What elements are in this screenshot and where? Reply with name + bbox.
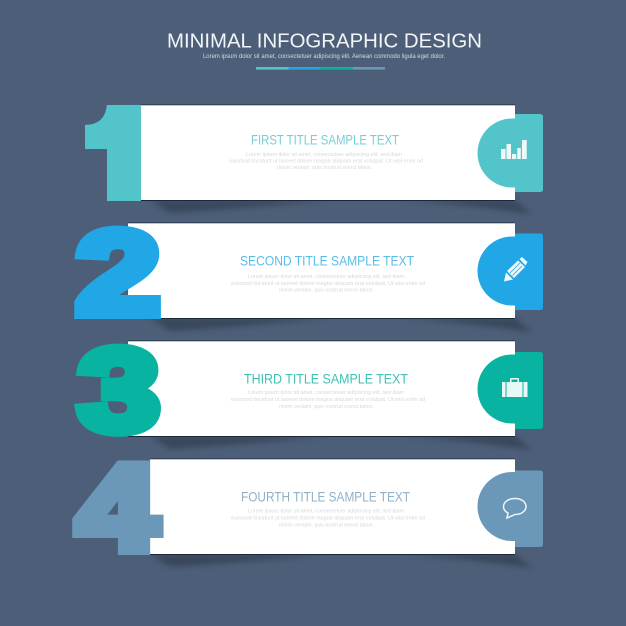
body text xyxy=(231,508,425,528)
tab with briefcase icon xyxy=(478,352,543,429)
body text xyxy=(231,274,425,294)
body text xyxy=(231,390,425,410)
title: MINIMAL INFOGRAPHIC DESIGN xyxy=(167,30,482,52)
body text: minim veniam, quis nostrud exerci tation. xyxy=(279,404,374,410)
body text: Lorem ipsum dolor sit amet, consectetuer adipiscing elit, sed diam xyxy=(248,274,404,280)
icon: pencil xyxy=(504,257,528,282)
title colour bar xyxy=(256,67,385,70)
icon: briefcase xyxy=(502,378,528,397)
body text: Lorem ipsum dolor sit amet, consectetuer adipiscing elit, sed diam xyxy=(248,508,404,514)
panel: fourth item xyxy=(77,440,543,576)
body text: minim veniam, quis nostrud exerci tation. xyxy=(279,288,374,294)
icon: bar chart xyxy=(501,140,527,159)
body text xyxy=(229,152,423,171)
body text: euismod tincidunt ut laoreet dolore magna aliquam erat volutpat. Ut wisi enim ad xyxy=(229,158,423,164)
numeral 1 xyxy=(85,105,141,201)
body text: minim veniam, quis nostrud exerci tation. xyxy=(279,522,374,528)
body text: Lorem ipsum dolor sit amet, consectetuer adipiscing elit, sed diam xyxy=(248,390,404,396)
icon: speech bubble xyxy=(504,498,526,518)
heading: SECOND TITLE SAMPLE TEXT xyxy=(240,252,414,268)
body text: minim veniam, quis nostrud exerci tation. xyxy=(277,165,372,171)
heading: FOURTH TITLE SAMPLE TEXT xyxy=(241,488,410,504)
tab with speech bubble icon xyxy=(478,470,543,547)
panel: second item xyxy=(76,207,543,339)
body text: Lorem ipsum dolor sit amet, consectetuer adipiscing elit, sed diam xyxy=(246,152,402,158)
tab with pencil icon xyxy=(478,234,543,310)
body text: euismod tincidunt ut laoreet dolore magna aliquam erat volutpat. Ut wisi enim ad xyxy=(231,516,425,522)
subtitle: Lorem ipsum dolor sit amet, consectetuer adipiscing elit. Aenean commodo ligula eget dolor. xyxy=(203,54,445,60)
numeral 4: 4 xyxy=(77,440,158,576)
body text: euismod tincidunt ut laoreet dolore magna aliquam erat volutpat. Ut wisi enim ad xyxy=(231,281,425,287)
panel: third item xyxy=(78,326,543,456)
numeral 3: 3 xyxy=(78,326,160,456)
numeral 2: 2 xyxy=(76,207,160,339)
body text: euismod tincidunt ut laoreet dolore magna aliquam erat volutpat. Ut wisi enim ad xyxy=(231,397,425,403)
tab with bar chart icon xyxy=(478,114,543,192)
numeral 1: 1 xyxy=(80,75,138,231)
heading: FIRST TITLE SAMPLE TEXT xyxy=(251,132,399,148)
heading: THIRD TITLE SAMPLE TEXT xyxy=(244,370,408,386)
panel: first item xyxy=(85,104,543,214)
